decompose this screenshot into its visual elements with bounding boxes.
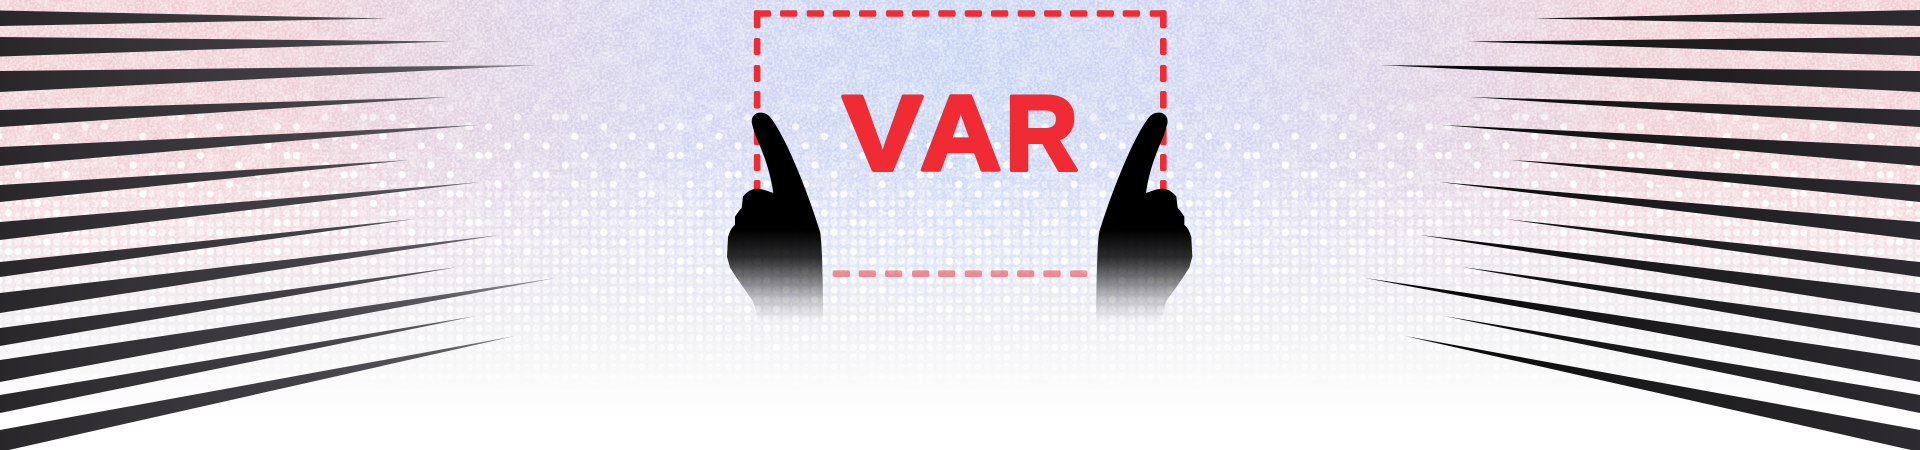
title: VAR: R bbox=[1005, 73, 1078, 193]
title: VAR: V bbox=[842, 73, 922, 193]
dashed red frame bbox=[754, 10, 1167, 277]
icon: right hand pointing up bbox=[1096, 113, 1192, 322]
title: VAR: A bbox=[920, 73, 1002, 193]
speed lines: right bbox=[1365, 10, 1920, 450]
icon: left hand pointing up bbox=[727, 113, 823, 322]
speed lines: left bbox=[0, 10, 556, 450]
halftone dot field bbox=[0, 94, 1920, 350]
